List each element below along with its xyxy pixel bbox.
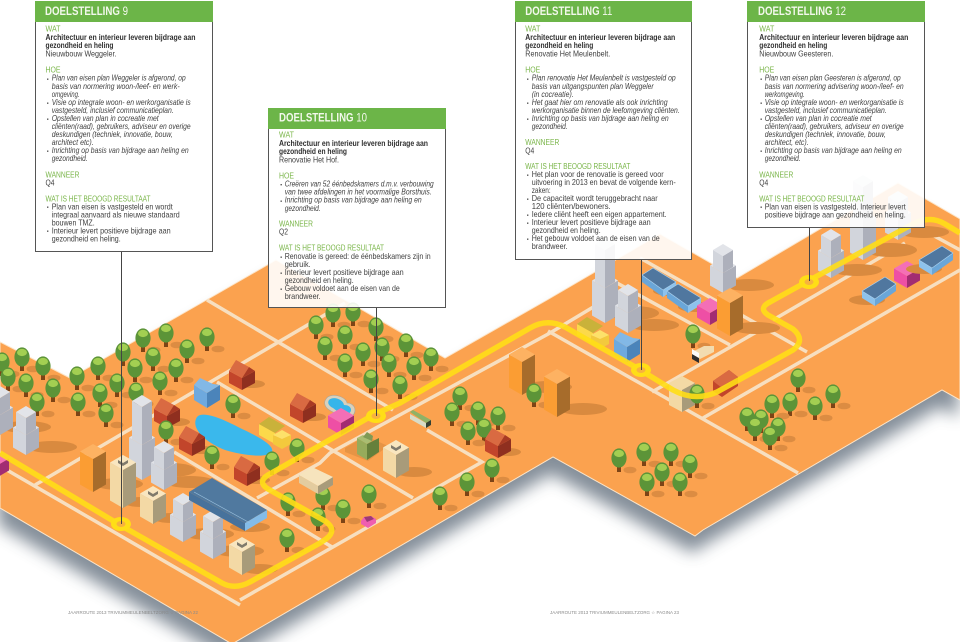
text: doelstelling 12 content: Plan van eisen plan Geesteren is afgerond, op	[765, 73, 901, 83]
text: doelstelling 10 content: Architectuur en interieur leveren bijdrage aan	[279, 138, 428, 148]
text: doelstelling 9 content: Interieur levert positieve bijdrage aan	[52, 225, 171, 235]
panel: doelstelling 9	[35, 1, 213, 252]
text: doelstelling 12 content: werkomgeving.	[765, 89, 805, 99]
text: doelstelling 11 content: Het gaat hier om renovatie als ook inrichting	[532, 97, 668, 107]
text: doelstelling 12 content: gezondheid.	[765, 153, 801, 163]
text: doelstelling 9 content: WANNEER	[46, 170, 80, 179]
text: doelstelling 12 content: basis van normering advisering woon-/leef- en	[765, 81, 904, 91]
text: doelstelling 10 content: Q2	[279, 227, 288, 237]
text: doelstelling 11 content: brandweer.	[532, 241, 568, 251]
header: doelstelling 10	[268, 108, 446, 129]
text: doelstelling 11 content: WAT IS HET BEOOGD RESULTAAT	[525, 162, 630, 171]
text: doelstelling 12 content: Inrichting op basis van bijdrage aan heling en	[765, 145, 902, 155]
text: doelstelling 11 content: Interieur levert positieve bijdrage aan	[532, 217, 651, 227]
trees and houses: centre-right grove	[432, 347, 607, 511]
text: doelstelling 9 content: HOE	[46, 66, 60, 75]
text: doelstelling 9 content: omgeving.	[52, 89, 80, 99]
text: doelstelling 9 content: Nieuwbouw Weggeler.	[46, 48, 116, 58]
text: doelstelling 11 content: Plan renovatie Het Meulenbelt is vastgesteld op	[532, 73, 676, 83]
text: doelstelling 11 content: WANNEER	[525, 138, 560, 147]
text: doelstelling 12 content: HOE	[759, 66, 774, 75]
text: doelstelling 12 content: deskundigen (techniek, innovatie, bouw,	[765, 129, 886, 139]
footer: right page: JAARROUTE 2013 TRIVIUMMEULENBELTZORG ☆ PAGINA 23	[550, 610, 679, 615]
text: doelstelling 11 content: zaken:	[532, 185, 551, 195]
text: doelstelling 12 content: positieve bijdrage aan gezondheid en heling.	[765, 209, 906, 219]
panel: doelstelling 10	[268, 108, 446, 308]
text: doelstelling 12 content: Opstellen van plan in cocreatie met	[765, 113, 872, 123]
text: doelstelling 10 content: Renovatie is gereed: de éénbedskamers zijn in	[285, 251, 431, 261]
text: doelstelling 11 content: 120 cliënten/bewoners.	[532, 201, 611, 211]
text: doelstelling 9 content: gezondheid en heling.	[52, 233, 121, 243]
text: doelstelling 12 content: cliënten(raad), gebruikers, adviseur en overige	[765, 121, 904, 131]
text: doelstelling 12 content: WAT IS HET BEOOGD RESULTAAT	[759, 194, 864, 203]
text: doelstelling 12 content: WANNEER	[759, 170, 794, 179]
text: doelstelling 12 content: vastgesteld, inclusief communicatieplan.	[765, 105, 887, 115]
text: doelstelling 12 content: architect, etc).	[765, 137, 809, 147]
text: doelstelling 9 content: WAT IS HET BEOOGD RESULTAAT	[46, 194, 151, 203]
text: doelstelling 11 content: basis van uitgangspunten plan Weggeler	[532, 81, 655, 91]
text: doelstelling 10 content: Creëren van 52 éénbedskamers d.m.v. verbouwing	[285, 178, 434, 188]
text: doelstelling 10 content: Renovatie Het Hof.	[279, 154, 339, 164]
text: doelstelling 11 content: Architectuur en interieur leveren bijdrage aan	[525, 32, 675, 42]
footer: left page: JAARROUTE 2013 TRIVIUMMEULENBELTZORG ☆ PAGINA 22	[68, 610, 198, 615]
text: doelstelling 10 content: gebruik.	[285, 259, 311, 269]
text: doelstelling 12 content: Visie op integrale woon- en werkorganisatie is	[765, 97, 904, 107]
text: doelstelling 9 content: Inrichting op basis van bijdrage aan heling en	[52, 145, 189, 155]
text: doelstelling 9 content: vastgesteld, inclusief communicatieplan.	[52, 105, 174, 115]
text: doelstelling 11 content	[525, 25, 680, 251]
text: doelstelling 9 content: integraal aanvaard als nieuwe standaard	[52, 209, 180, 219]
text: doelstelling 9 content: bouwen TMZ.	[52, 217, 95, 227]
buildings: right district	[577, 175, 953, 412]
text: doelstelling 11 content: WAT	[525, 25, 540, 34]
text: doelstelling 10 content: WAT	[279, 131, 294, 140]
text: doelstelling 9 content: basis van normering woon-/leef- en werk-	[52, 81, 180, 91]
text: doelstelling 12 content: WAT	[759, 25, 774, 34]
roads	[0, 231, 960, 605]
trees: back groves	[0, 302, 449, 428]
text: doelstelling 11 content: (in cocreatie).	[532, 89, 574, 99]
panel: doelstelling 11	[515, 1, 692, 260]
text: doelstelling 11 content: Het gebouw voldoet aan de eisen van de	[532, 233, 660, 243]
text: doelstelling 9 content: Opstellen van plan in cocreatie met	[52, 113, 159, 123]
text: doelstelling 9 content: Plan van eisen is vastgesteld en wordt	[52, 201, 173, 211]
swimming pool	[325, 395, 355, 418]
text: doelstelling 10 content: WAT IS HET BEOOGD RESULTAAT	[279, 244, 384, 253]
text: doelstelling 10 content: gezondheid en heling.	[285, 275, 354, 285]
text: doelstelling 11 content: uitvoering in 2013 en bevat de volgende kern-	[532, 177, 676, 187]
text: doelstelling 11 content: Renovatie Het Meulenbelt.	[525, 48, 610, 58]
text: doelstelling 10 content: gezondheid en heling	[279, 146, 347, 156]
text: doelstelling 12 content: Architectuur en interieur leveren bijdrage aan	[759, 32, 908, 42]
text: doelstelling 9 content: Visie op integrale woon- en werkorganisatie is	[52, 97, 191, 107]
header: doelstelling 10: DOELSTELLING 10	[279, 111, 367, 125]
route milestones and connector lines	[111, 227, 819, 531]
text: doelstelling 9 content: WAT	[46, 25, 61, 34]
text: doelstelling 10 content: gezondheid.	[285, 203, 321, 213]
header: doelstelling 11: DOELSTELLING 11	[525, 4, 612, 18]
header: doelstelling 9: DOELSTELLING 9	[45, 4, 128, 18]
text: doelstelling 11 content: gezondheid.	[532, 121, 568, 131]
text: doelstelling 12 content	[759, 25, 908, 219]
header: doelstelling 9	[35, 1, 213, 22]
panel: doelstelling 12	[747, 1, 925, 228]
text: doelstelling 11 content: gezondheid en heling.	[532, 225, 601, 235]
text: doelstelling 9 content: deskundigen (techniek, innovatie, bouw,	[52, 129, 173, 139]
text: doelstelling 9 content: Plan van eisen plan Weggeler is afgerond, op	[52, 73, 186, 83]
text: doelstelling 11 content: gezondheid en heling	[525, 40, 593, 50]
text: doelstelling 12 content: gezondheid en heling	[759, 40, 827, 50]
text: doelstelling 11 content: HOE	[525, 66, 540, 75]
text: doelstelling 9 content	[46, 25, 196, 243]
header: doelstelling 12	[747, 1, 925, 22]
lake	[195, 415, 272, 456]
text: doelstelling 10 content: Gebouw voldoet aan de eisen van de	[285, 283, 400, 293]
text: doelstelling 10 content: Inrichting op basis van bijdrage aan heling en	[285, 195, 422, 205]
header: doelstelling 11	[515, 1, 692, 22]
text: doelstelling 11 content: Het plan voor de renovatie is gereed voor	[532, 169, 664, 179]
text: doelstelling 10 content: brandweer.	[285, 291, 321, 301]
text: doelstelling 10 content	[279, 131, 434, 301]
text: doelstelling 11 content: Q4	[525, 145, 535, 155]
text: doelstelling 12 content: Plan van eisen is vastgesteld. Interieur levert	[765, 201, 906, 211]
text: doelstelling 9 content: cliënten(raad), gebruikers, adviseur en overige	[52, 121, 191, 131]
text: doelstelling 9 content: Architectuur en interieur leveren bijdrage aan	[46, 32, 196, 42]
text: doelstelling 9 content: gezondheid.	[52, 153, 88, 163]
buildings: left district	[0, 360, 326, 575]
text: doelstelling 9 content: architect etc).	[52, 137, 94, 147]
text: doelstelling 10 content: van twee afdelingen in het voormalige Borsthuis.	[285, 186, 432, 196]
text: doelstelling 12 content: Q4	[759, 178, 769, 188]
header: doelstelling 12: DOELSTELLING 12	[758, 4, 846, 18]
text: doelstelling 11 content: Iedere cliënt heeft een eigen appartement.	[532, 209, 667, 219]
yellow route line	[0, 220, 960, 586]
text: doelstelling 11 content: De capaciteit wordt teruggebracht naar	[532, 193, 658, 203]
map: orange land mass	[0, 183, 960, 642]
trees: right groves	[611, 368, 850, 497]
large blue building	[189, 478, 270, 532]
text: doelstelling 10 content: WANNEER	[279, 220, 313, 229]
text: doelstelling 9 content: gezondheid en heling	[46, 40, 114, 50]
text: doelstelling 12 content: Nieuwbouw Geesteren.	[759, 48, 833, 58]
text: doelstelling 11 content: werkorganisatie binnen de leefomgeving cliënten.	[532, 105, 680, 115]
buildings and vehicles: centre district	[279, 408, 432, 553]
text: doelstelling 11 content: Inrichting op basis van bijdrage aan heling en	[532, 113, 669, 123]
text: doelstelling 9 content: Q4	[46, 178, 55, 188]
text: doelstelling 10 content: HOE	[279, 171, 294, 180]
text: doelstelling 10 content: Interieur levert positieve bijdrage aan	[285, 267, 404, 277]
